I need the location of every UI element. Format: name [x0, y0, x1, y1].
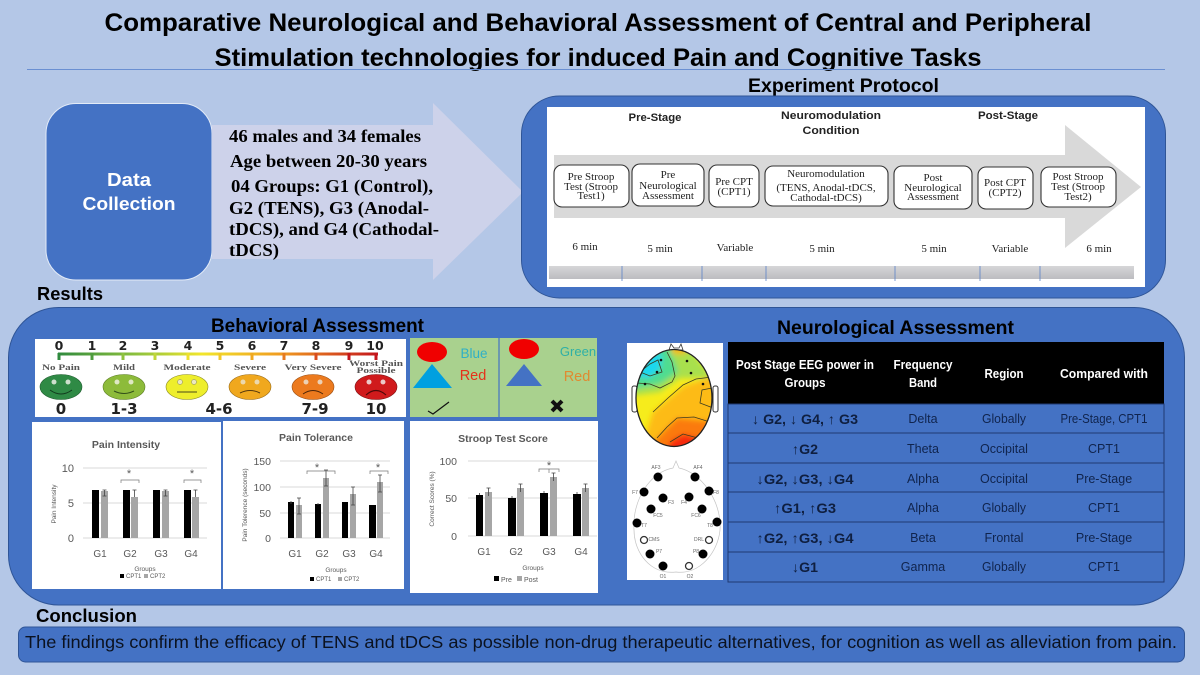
- chart: stroop test score: 100: [439, 456, 457, 468]
- chart: pain intensity: Pain Intensity: [92, 439, 160, 451]
- table row: alpha occipital: Pre-Stage: [1076, 472, 1132, 486]
- data collection arrow with participant details: [212, 103, 523, 280]
- table row: beta: Frontal: [985, 531, 1023, 545]
- step: pre neurological assessment: Assessment: [642, 190, 694, 202]
- duration bar: [549, 266, 1134, 281]
- stage labels: Neuromodulation: [781, 110, 881, 122]
- table row: delta: Globally: [982, 412, 1027, 426]
- pain scale: 1: [88, 338, 96, 353]
- chart: stroop test score: G3: [542, 547, 556, 558]
- title: Stimulation technologies for induced Pain and Cognitive Tasks: [214, 44, 982, 72]
- conclusion bar: The findings confirm the efficacy of TENS and tDCS as possible non-drug therapeutic alternatives, for cognition as well as alleviation from pain.: [25, 632, 1177, 652]
- electrode layout: FC6: [691, 513, 701, 519]
- heading: neurological assessment: Neurological Assessment: [777, 317, 1014, 339]
- chart: pain intensity: G4: [184, 549, 198, 560]
- chart: pain intensity: [32, 422, 221, 589]
- durations: 5 min: [809, 243, 835, 255]
- electrode layout: AF4: [693, 465, 703, 471]
- data collection box: [46, 104, 212, 280]
- step: post neurological assessment: Post: [924, 172, 942, 184]
- congruent example: Blue: [460, 346, 488, 361]
- data collection arrow with participant details: 46 males and 34 females: [229, 126, 421, 146]
- electrode layout: T8: [707, 523, 713, 529]
- chart: stroop test score: Groups: [522, 565, 544, 572]
- pain scale: No Pain: [42, 362, 80, 372]
- electrode layout: F3: [668, 500, 674, 506]
- table row: alpha occipital: [756, 471, 1132, 487]
- chart: pain tolerance: Pain Tolerance: [279, 432, 353, 444]
- table row: alpha occipital: Occipital: [980, 472, 1028, 486]
- step: pre cpt: [709, 165, 759, 207]
- pain scale: Moderate: [164, 362, 211, 372]
- durations: 5 min: [647, 243, 673, 255]
- electrode layout: CMS: [648, 537, 660, 543]
- incongruent example: [506, 339, 596, 411]
- chart: pain tolerance: G3: [342, 549, 356, 560]
- electrode layout: [632, 461, 722, 580]
- chart: stroop test score: 50: [445, 493, 457, 505]
- chart: pain tolerance: 150: [253, 456, 271, 468]
- pain scale: 5: [216, 338, 224, 353]
- face: very severe: [292, 374, 334, 400]
- electrode layout: O2: [687, 574, 694, 580]
- step: neuromodulation: [765, 166, 888, 206]
- face: severe: [229, 374, 271, 400]
- chart: pain intensity: 10: [62, 463, 74, 475]
- step: pre cpt: Pre CPT: [715, 176, 753, 188]
- electrode layout: DRL: [694, 537, 704, 543]
- pain scale: Possible: [356, 365, 396, 375]
- chart: pain intensity: 0: [68, 533, 74, 545]
- pain scale: 0: [56, 400, 66, 418]
- table row: delta: Delta: [908, 412, 938, 426]
- chart: stroop test score: *: [547, 460, 552, 472]
- pain scale: 4: [184, 338, 193, 353]
- step: pre stroop test: Pre Stroop: [568, 171, 615, 183]
- stage labels: Post-Stage: [978, 110, 1038, 122]
- head topography map: [630, 344, 720, 452]
- chart: pain intensity: *: [190, 468, 195, 480]
- chart: pain tolerance: 50: [259, 508, 271, 520]
- table row: alpha global: CPT1: [1088, 501, 1120, 515]
- panel: results: [8, 308, 1184, 605]
- electrode layout: F8: [713, 490, 719, 496]
- electrode layout: FC5: [653, 513, 663, 519]
- pain scale: 3: [151, 338, 159, 353]
- durations: Variable: [717, 242, 753, 254]
- table row: alpha global: Alpha: [907, 501, 939, 515]
- pain scale: 10: [366, 338, 384, 353]
- chart: stroop test score: Correct Scores (%): [429, 471, 436, 527]
- table row: alpha global: ↑G1, ↑G3: [774, 500, 836, 516]
- chart: stroop test score: [410, 421, 598, 593]
- pain scale: Severe: [234, 362, 266, 372]
- table row: delta: [752, 411, 1148, 427]
- step: post cpt: [978, 167, 1033, 209]
- electrode layout: AF3: [651, 465, 661, 471]
- table header: Region: [984, 367, 1024, 381]
- chart: pain tolerance: [223, 421, 404, 589]
- pain scale: 2: [119, 338, 127, 353]
- data collection arrow with participant details: tDCS): [229, 240, 279, 260]
- contour lines: [637, 352, 713, 442]
- pain scale: 8: [312, 338, 320, 353]
- durations: 6 min: [1086, 243, 1112, 255]
- table row: gamma: ↓G1: [792, 559, 818, 575]
- title: [104, 9, 1092, 72]
- step: post stroop test: Test (Stroop: [1051, 181, 1105, 193]
- step: post stroop test: [1041, 167, 1116, 207]
- chart: stroop test score: Stroop Test Score: [458, 433, 548, 445]
- table row: theta: CPT1: [1088, 442, 1120, 456]
- heading: behavioral assessment: Behavioral Assessment: [211, 315, 424, 337]
- chart: pain tolerance: *: [376, 462, 381, 474]
- step: pre stroop test: Test1): [577, 190, 605, 202]
- table row: delta: Pre-Stage, CPT1: [1060, 412, 1148, 426]
- step: pre neurological assessment: Neurological: [639, 180, 697, 192]
- data collection arrow with participant details: G2 (TENS), G3 (Anodal-: [229, 198, 429, 218]
- table header: Post Stage EEG power in: [736, 358, 874, 372]
- table row: theta: ↑G2: [792, 441, 818, 457]
- pain scale: 4-6: [205, 400, 233, 418]
- table: EEG power results: [728, 342, 1164, 582]
- durations: [572, 241, 1112, 255]
- chart: stroop test score: 0: [451, 531, 457, 543]
- pain scale: 1-3: [110, 400, 138, 418]
- table row: gamma: Globally: [982, 560, 1027, 574]
- durations: 6 min: [572, 241, 598, 253]
- chart: stroop test score: Post: [524, 577, 538, 584]
- table row: gamma: [792, 559, 1120, 575]
- data collection arrow with participant details: 04 Groups: G1 (Control),: [231, 176, 433, 196]
- step: neuromodulation: (TENS, Anodal-tDCS,: [776, 182, 876, 194]
- table row: alpha occipital: ↓G2, ↓G3, ↓G4: [756, 471, 854, 487]
- pain scale: Very Severe: [284, 362, 342, 372]
- pain scale: 7-9: [301, 400, 329, 418]
- table row: beta: Pre-Stage: [1076, 531, 1132, 545]
- chart: pain intensity: 5: [68, 498, 74, 510]
- chart: pain tolerance: Groups: [325, 567, 347, 574]
- chart: pain intensity: CPT1: [126, 574, 142, 580]
- congruent example: [413, 342, 488, 414]
- pain scale: Worst Pain: [349, 358, 403, 368]
- data collection box: Data: [107, 170, 152, 190]
- chart: pain tolerance: G1: [288, 549, 302, 560]
- electrode layout: F7: [632, 490, 638, 496]
- table row: alpha occipital: Alpha: [907, 472, 939, 486]
- chart: pain intensity: Pain Intensity: [51, 484, 58, 524]
- chart: stroop test score: G2: [509, 547, 523, 558]
- chart: pain intensity: G1: [93, 549, 107, 560]
- table header: Groups: [784, 376, 826, 390]
- pain scale: [35, 338, 406, 418]
- chart: stroop test score: G1: [477, 547, 491, 558]
- incongruent example: Red: [564, 369, 590, 385]
- heading: results: Results: [37, 284, 103, 304]
- step: pre cpt: (CPT1): [718, 186, 751, 198]
- chart: pain tolerance: 0: [265, 533, 271, 545]
- step: pre stroop test: [554, 165, 629, 207]
- step: post neurological assessment: Neurological: [904, 182, 962, 194]
- table row: alpha global: Globally: [982, 501, 1027, 515]
- table row: theta: [792, 441, 1120, 457]
- chart: pain tolerance: *: [315, 462, 320, 474]
- chart: pain intensity: *: [127, 468, 132, 480]
- step: post neurological assessment: [894, 166, 972, 209]
- step: post neurological assessment: Assessment: [907, 191, 959, 203]
- step: post stroop test: Post Stroop: [1052, 171, 1104, 183]
- pain scale: Mild: [113, 362, 135, 372]
- table row: theta: Theta: [907, 442, 939, 456]
- incongruent example: Green: [560, 344, 596, 359]
- table row: theta: Occipital: [980, 442, 1028, 456]
- chart: pain tolerance: CPT2: [344, 577, 360, 583]
- electrode layout: P7: [656, 549, 662, 555]
- table header: Frequency: [894, 358, 953, 372]
- table row: gamma: CPT1: [1088, 560, 1120, 574]
- table row: beta: ↑G2, ↑G3, ↓G4: [756, 530, 854, 546]
- face: moderate: [166, 374, 208, 400]
- congruent example: Red: [460, 368, 486, 384]
- pain scale: 7: [280, 338, 288, 353]
- chart: pain intensity: Groups: [134, 566, 156, 573]
- table row: beta: Beta: [910, 531, 936, 545]
- step: post cpt: (CPT2): [988, 187, 1022, 199]
- EEG topographic map and electrode layout: [627, 343, 723, 580]
- chart: pain tolerance: G2: [315, 549, 329, 560]
- step: post cpt: Post CPT: [984, 177, 1026, 189]
- stage labels: Pre-Stage: [628, 112, 682, 124]
- step: neuromodulation: Neuromodulation: [787, 168, 865, 180]
- face: worst pain: [355, 374, 397, 400]
- pain scale: 0: [55, 338, 64, 353]
- chart: pain intensity: G2: [123, 549, 137, 560]
- data collection arrow with participant details: tDCS), and G4 (Cathodal-: [229, 219, 439, 239]
- chart: stroop test score: G4: [574, 547, 588, 558]
- step: pre neurological assessment: Pre: [661, 169, 675, 181]
- step: post stroop test: Test2): [1064, 191, 1092, 203]
- chart: pain intensity: CPT2: [150, 574, 166, 580]
- table header: Band: [909, 376, 937, 390]
- step: pre neurological assessment: [632, 164, 704, 206]
- chart: pain tolerance: Pain Tolerence (seconds): [242, 468, 249, 542]
- heading: conclusion: Conclusion: [36, 605, 137, 626]
- electrode layout: T7: [641, 523, 647, 529]
- electrode layout: F4: [681, 500, 687, 506]
- table header: [736, 358, 1148, 390]
- electrode layout: P8: [693, 549, 699, 555]
- pain scale: 10: [366, 400, 386, 418]
- data collection box: Collection: [82, 194, 176, 214]
- heading: experiment protocol: Experiment Protocol: [748, 75, 939, 97]
- panel: experiment protocol: [522, 96, 1166, 298]
- stage labels: Condition: [802, 125, 860, 137]
- table row: alpha global: [774, 500, 1120, 516]
- chart: pain tolerance: 100: [253, 482, 271, 494]
- title: Comparative Neurological and Behavioral Assessment of Central and Peripheral: [104, 9, 1092, 37]
- step: pre stroop test: Test (Stroop: [564, 181, 618, 193]
- stroop test illustration: [410, 338, 597, 417]
- face: mild: [103, 374, 145, 400]
- table row: delta: ↓ G2, ↓ G4, ↑ G3: [752, 411, 858, 427]
- electrode layout: O1: [660, 574, 667, 580]
- data collection arrow with participant details: Age between 20-30 years: [230, 151, 427, 171]
- pain scale: 6: [248, 338, 257, 353]
- chart: pain tolerance: CPT1: [316, 577, 332, 583]
- stage labels: [628, 110, 1038, 137]
- chart: pain intensity: G3: [154, 549, 168, 560]
- table row: gamma: Gamma: [901, 560, 945, 574]
- table header: Compared with: [1060, 367, 1148, 381]
- step: neuromodulation: Cathodal-tDCS): [790, 192, 862, 204]
- chart: pain tolerance: G4: [369, 549, 383, 560]
- durations: 5 min: [921, 243, 947, 255]
- pain scale: 9: [345, 338, 353, 353]
- table row: beta: [756, 530, 1132, 546]
- conclusion bar: [18, 627, 1184, 662]
- face: no pain: [40, 374, 82, 400]
- protocol timeline arrow: [554, 125, 1141, 248]
- chart: stroop test score: Pre: [501, 577, 512, 584]
- durations: Variable: [992, 243, 1028, 255]
